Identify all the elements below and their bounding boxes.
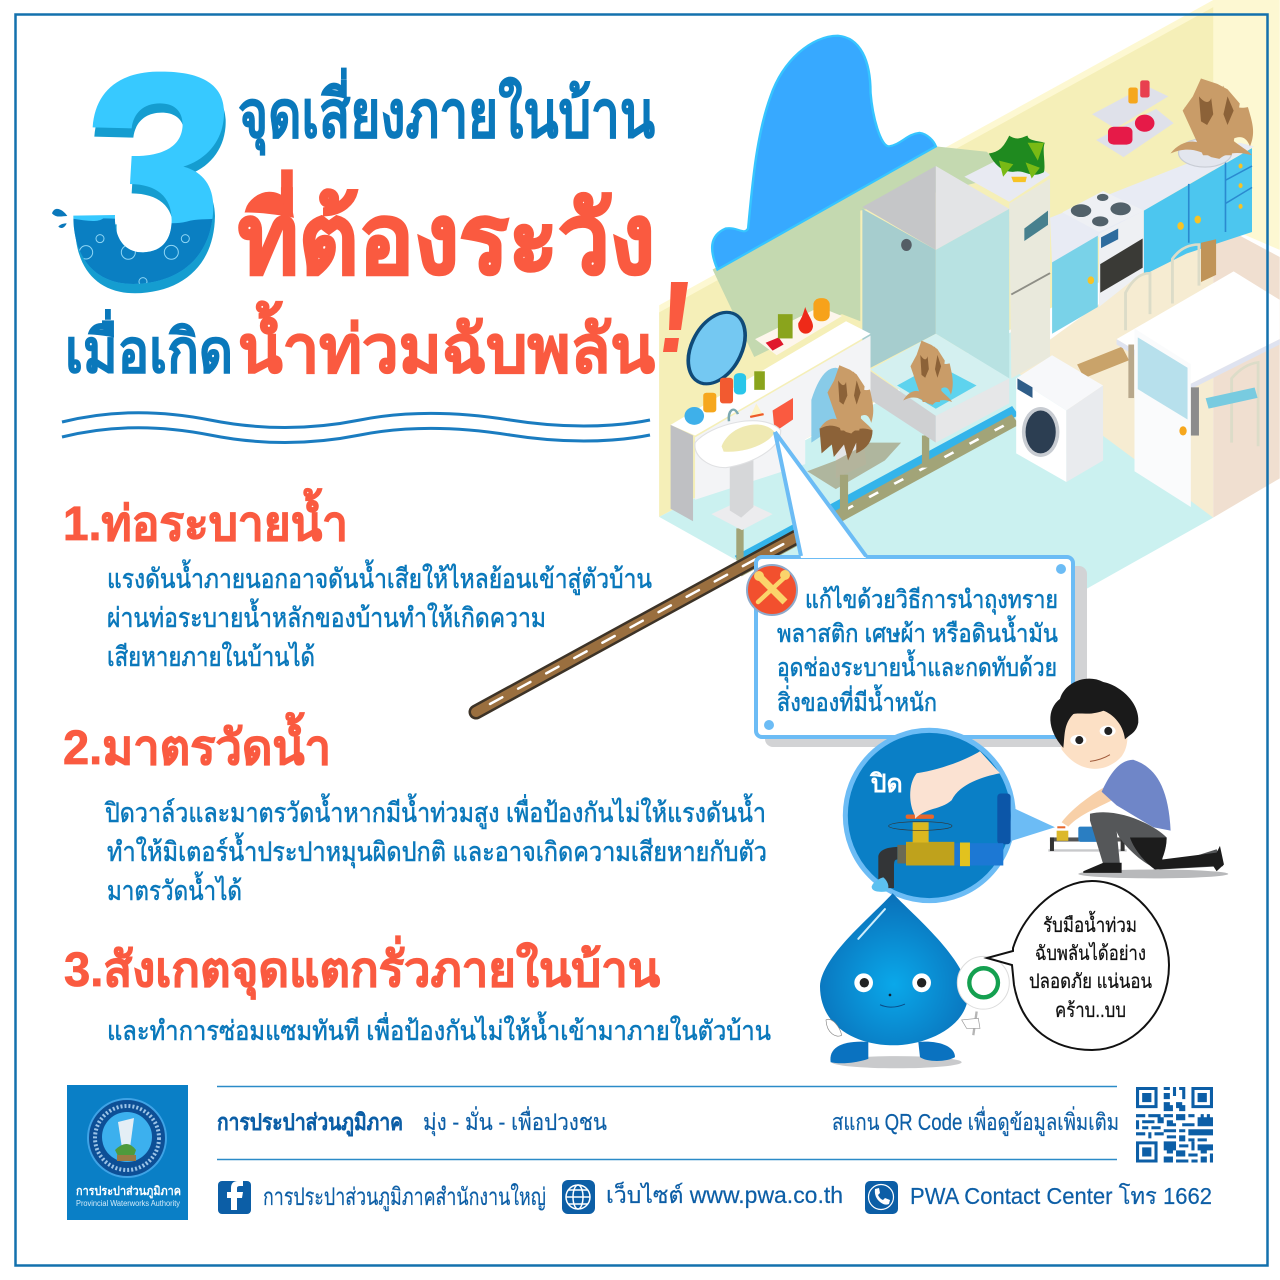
footer rows: การประปาส่วนภูมิภาค [217, 1109, 403, 1137]
section 3: leak points [64, 935, 771, 1046]
dining table and white cabinet [1117, 271, 1280, 507]
drain pipe in the floor [738, 353, 1126, 571]
icon: facebook [218, 1181, 251, 1214]
water meter [1048, 826, 1127, 852]
hand [910, 751, 1000, 819]
valve close-up circle [845, 730, 1055, 901]
callout: how to fix the drain: แก้ไขด้วยวิธีการนำถุงทราย [805, 585, 1058, 615]
legs [1090, 812, 1223, 870]
bathroom sink and sandbag [684, 371, 781, 530]
section 2: water meter: 2.มาตรวัดน้ำ [63, 712, 331, 775]
section 2: water meter: มาตรวัดน้ำได้ [107, 871, 242, 906]
section 2: water meter [63, 712, 767, 906]
illustration: flooded house cross-section [659, 0, 1280, 689]
footer rows [217, 1086, 1212, 1212]
washing machine [1016, 355, 1103, 482]
brass valve [889, 814, 970, 866]
title: จุดเสี่ยงภายในบ้าน [238, 67, 655, 156]
room walls and floor [659, 0, 1280, 689]
section 2: water meter: ทำให้มิเตอร์น้ำประปาหมุนผิดปกติ และอาจเกิดความเสียหายกับตัว [107, 832, 767, 869]
wave divider [62, 413, 650, 442]
sign with green circle [957, 956, 1009, 1009]
arm and shirt [1062, 787, 1115, 827]
footer rows: สแกน QR Code เพื่อดูข้อมูลเพิ่มเติม [832, 1106, 1119, 1136]
title: ที่ต้องระวัง [238, 170, 655, 294]
callout: how to fix the drain: สิ่งของที่มีน้ำหนัก [777, 684, 937, 717]
callout: how to fix the drain: พลาสติก เศษผ้า หรือดินน้ำมัน [777, 615, 1058, 648]
kitchen wall shelf with bottles and bowls [1092, 80, 1174, 157]
character: water drop mascot [820, 893, 1009, 1068]
icon: wrench and screwdriver [747, 565, 797, 615]
section 1: drainage pipe: แรงดันน้ำภายนอกอาจดันน้ำเสียให้ไหลย้อนเข้าสู่ตัวบ้าน [107, 559, 652, 595]
logo: Provincial Waterworks Authority [67, 1085, 188, 1220]
label: close: ปิด [869, 770, 903, 798]
footer rows: การประปาส่วนภูมิภาคสำนักงานใหญ่ [263, 1183, 546, 1212]
section 2: water meter: ปิดวาล์วและมาตรวัดน้ำหากมีน้ำท่วมสูง เพื่อป้องกันไม่ให้แรงดันน้ำ [105, 793, 766, 829]
logo: Provincial Waterworks Authority: Provincial Waterworks Authority [76, 1199, 180, 1208]
callout: how to fix the drain [756, 432, 1087, 747]
dining chairs [1126, 245, 1258, 446]
fridge and potted plant [964, 136, 1050, 378]
speech bubble [987, 881, 1169, 1050]
footer rows: มุ่ง - มั่น - เพื่อปวงชน [423, 1106, 607, 1136]
footer rows: เว็บไซต์ www.pwa.co.th [606, 1180, 843, 1208]
callout: how to fix the drain: อุดช่องระบายน้ำและกดทับด้วย [777, 649, 1057, 683]
bathroom counter, toilet and towel [671, 298, 901, 521]
logo: Provincial Waterworks Authority: การประปาส่วนภูมิภาค [76, 1184, 181, 1199]
speech bubble: คร้าบ..บบ [1055, 1000, 1126, 1022]
speech bubble: รับมือน้ำท่วม [1043, 911, 1137, 937]
speech bubble: ฉับพลันได้อย่าง [1035, 942, 1146, 965]
section 3: leak points: และทำการซ่อมแซมทันที เพื่อป้องกันไม่ให้น้ำเข้ามาภายในตัวบ้าน [107, 1011, 771, 1046]
speech bubble: ปลอดภัย แน่นอน [1029, 971, 1152, 993]
section 1: drainage pipe [63, 488, 652, 672]
shower cabin [862, 166, 1009, 443]
title: น้ำท่วมฉับพลัน [238, 300, 655, 386]
footer rows: PWA Contact Center โทร 1662 [910, 1183, 1212, 1209]
icon: globe [562, 1180, 595, 1214]
blue pipe [953, 794, 1011, 865]
kitchen counter, stove and cabinets [1050, 79, 1254, 334]
title: เมื่อเกิด [65, 309, 233, 385]
section 1: drainage pipe: ผ่านท่อระบายน้ำหลักของบ้านทำให้เกิดความ [107, 598, 546, 633]
QR code [1136, 1087, 1213, 1162]
character: man closing the valve [1048, 679, 1228, 878]
section 1: drainage pipe: เสียหายภายในบ้านได้ [107, 641, 315, 672]
title [65, 67, 688, 386]
black elbow and drip [878, 847, 897, 888]
flood water blob [712, 36, 936, 270]
mirror [677, 305, 756, 391]
section 1: drainage pipe: 1.ท่อระบายน้ำ [63, 488, 348, 551]
section 3: leak points: 3.สังเกตจุดแตกรั่วภายในบ้าน [64, 935, 660, 1000]
number 3 [52, 72, 226, 293]
head [1061, 703, 1127, 769]
icon: phone [865, 1181, 898, 1214]
buried drain pipe [476, 535, 800, 712]
